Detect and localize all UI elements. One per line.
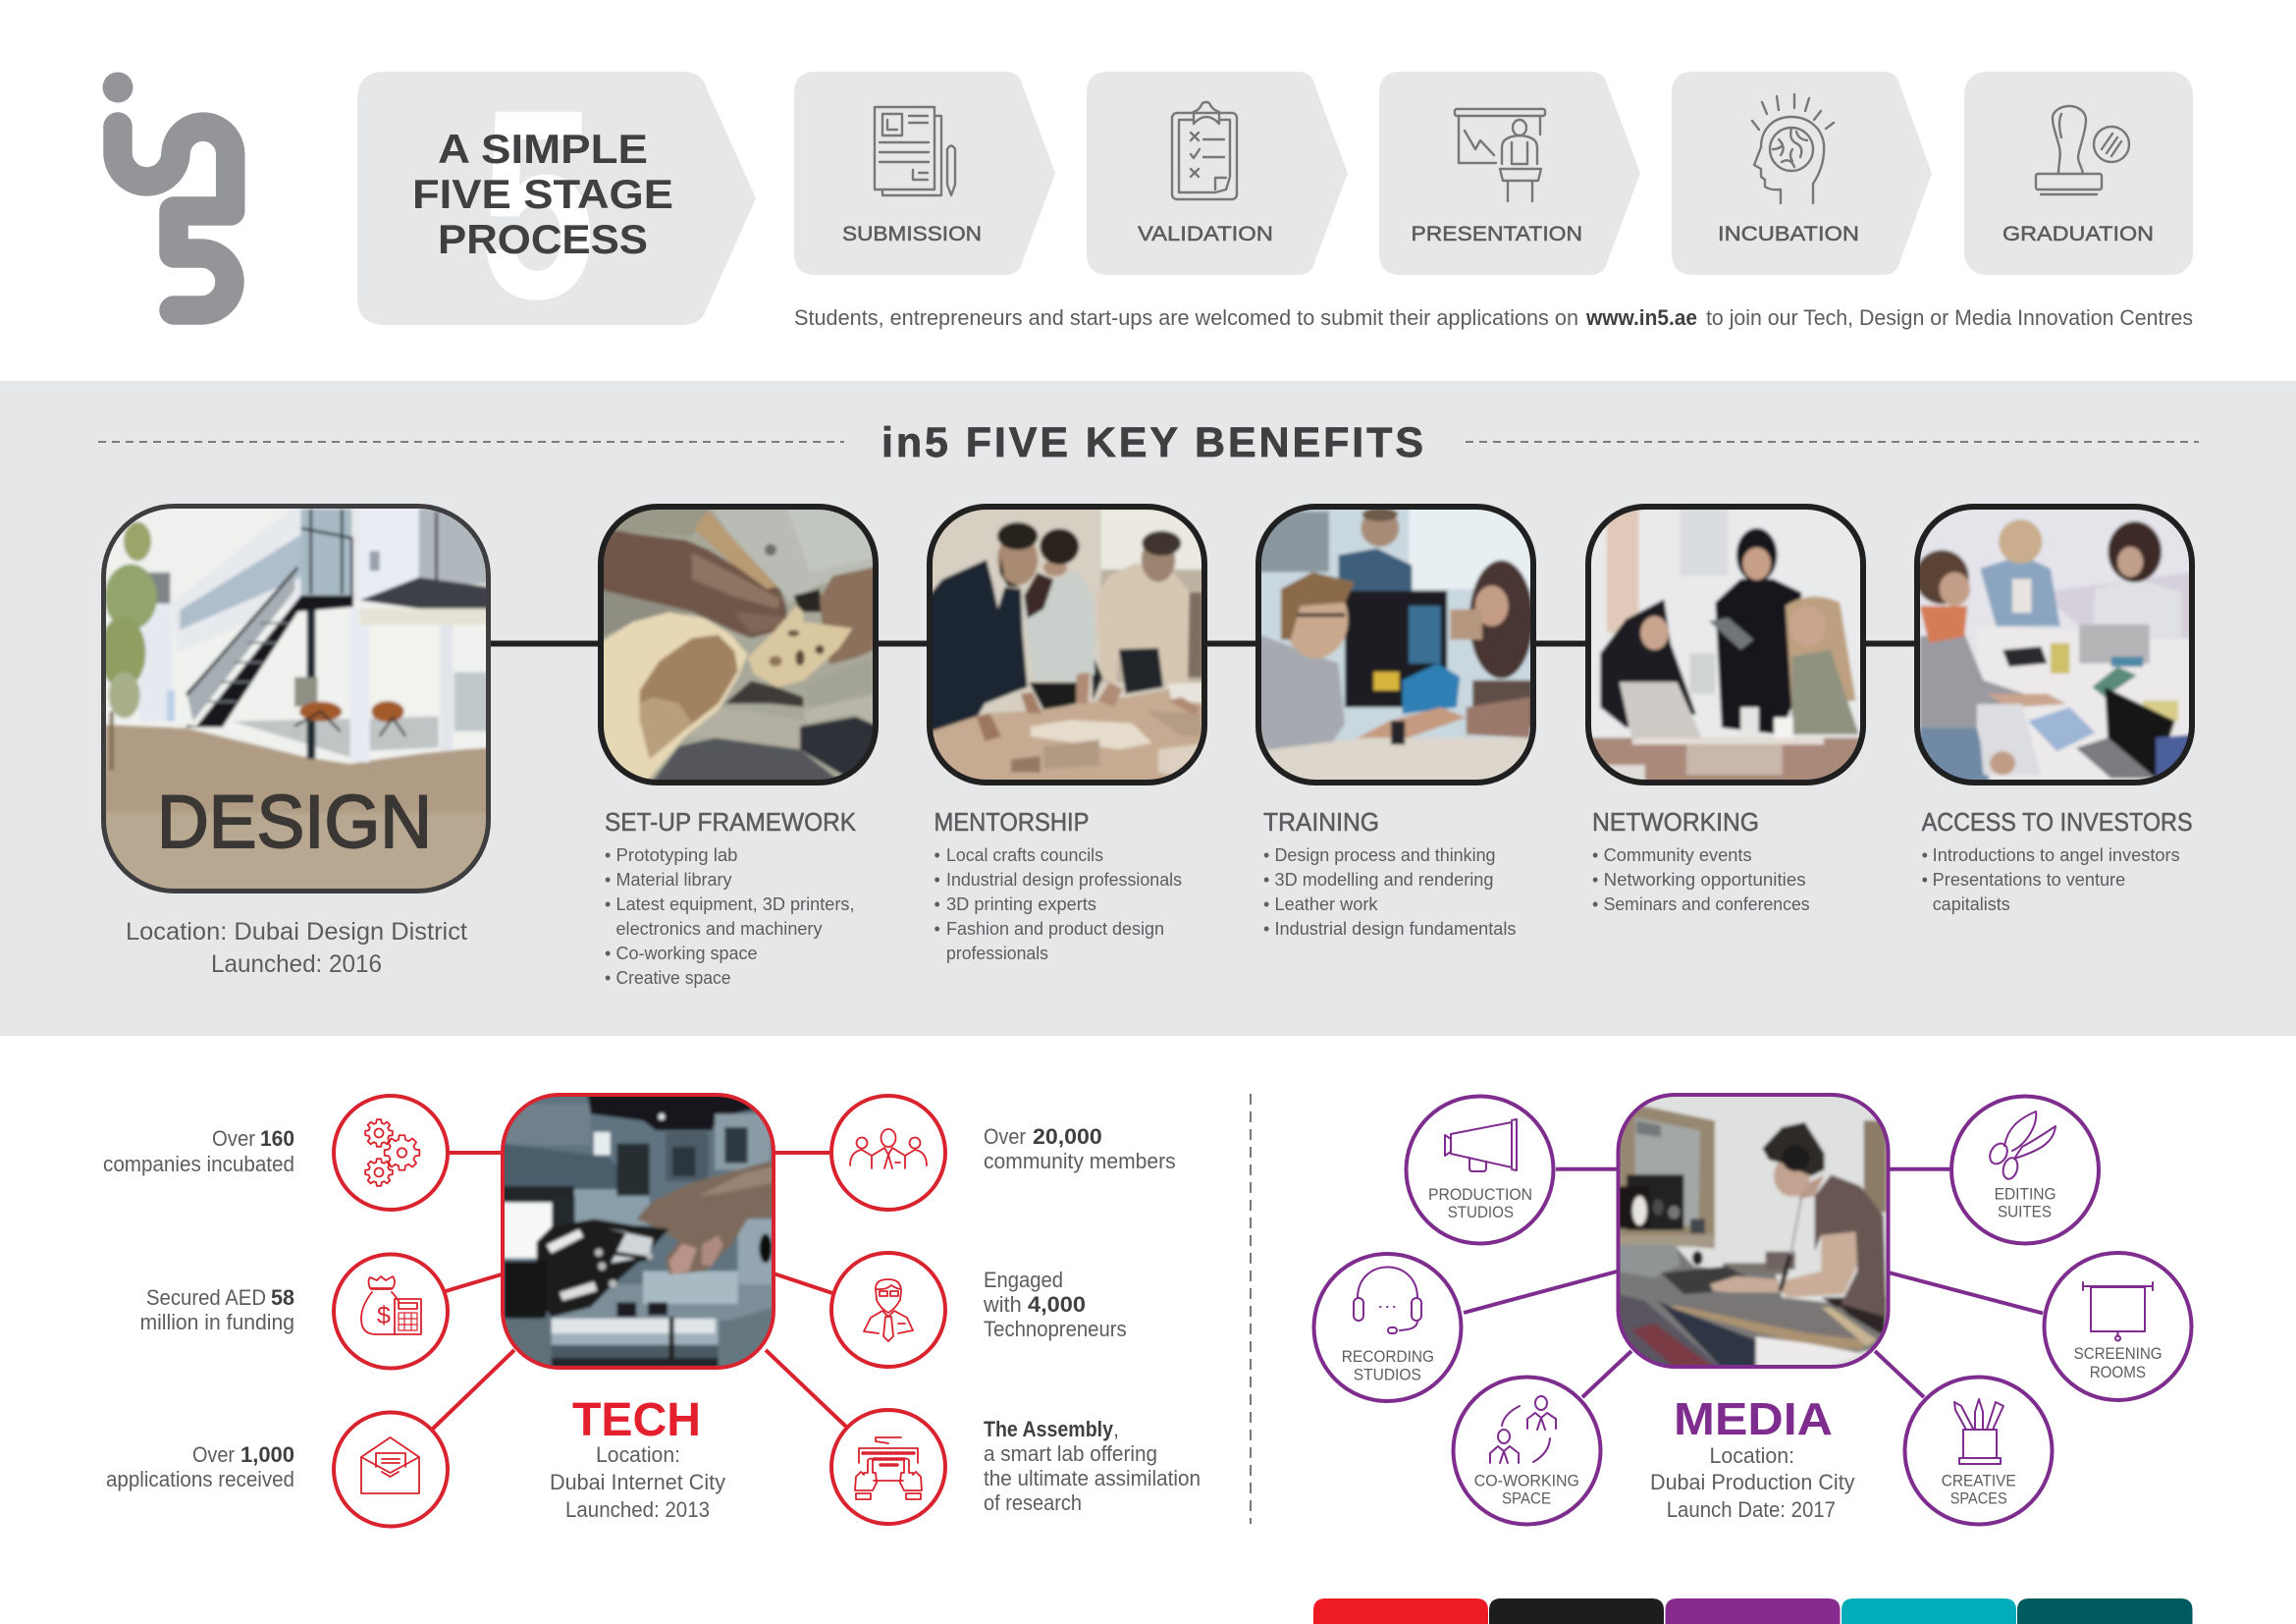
photo: access to investors — [1910, 501, 2198, 788]
text block: networking: • — [1592, 894, 1598, 914]
text block: set-up framework: • — [605, 944, 611, 963]
stat: applications: applications received — [106, 1467, 294, 1491]
icon: headset — [1354, 1267, 1421, 1333]
stage: presentation — [1379, 72, 1640, 275]
stat: technopreneurs — [983, 1268, 1127, 1341]
icon: pencil cup — [1954, 1399, 2003, 1464]
stage: validation — [1087, 72, 1348, 275]
circle: production studios — [1406, 1096, 1553, 1243]
heading: media: Launch Date: 2017 — [1667, 1497, 1836, 1522]
circle: recording studios — [1313, 1254, 1461, 1401]
panel: five key benefits — [0, 381, 2296, 1036]
photo: design building: DESIGN — [157, 781, 432, 864]
heading: media — [1650, 1393, 1855, 1522]
text block: set-up framework: Latest equipment, 3D printers, — [616, 894, 854, 914]
circle: production studios: STUDIOS — [1448, 1204, 1514, 1221]
logo: in5 — [102, 73, 231, 310]
text block: set-up framework: Creative space — [616, 968, 730, 988]
photo: training — [1250, 501, 1543, 788]
text block: set-up framework: • — [605, 845, 611, 865]
panel: a simple five stage process: PROCESS — [438, 216, 648, 262]
stat: funding — [139, 1285, 294, 1334]
photo: tech robot hand — [499, 1091, 777, 1370]
text block: networking: Seminars and conferences — [1604, 894, 1810, 914]
heading: tech: Launched: 2013 — [565, 1497, 710, 1522]
circle: screening rooms: SCREENING — [2074, 1345, 2163, 1363]
circle: screening rooms: ROOMS — [2090, 1364, 2146, 1381]
intro sentence: to join our Tech, Design or Media Innovation Centres — [1706, 305, 2193, 330]
circle: editing suites — [1951, 1096, 2099, 1243]
text: design location: Launched: 2016 — [211, 950, 382, 978]
stat: community members — [984, 1124, 1176, 1173]
icon: stamp — [2036, 106, 2129, 194]
stat: funding: 58 — [271, 1285, 294, 1310]
text block: training — [1263, 807, 1516, 939]
text block: set-up framework: Prototyping lab — [616, 845, 738, 865]
icon: technopreneur — [831, 1253, 945, 1367]
intro sentence: Students, entrepreneurs and start-ups are welcomed to submit their applications on — [794, 305, 1578, 330]
text block: networking: NETWORKING — [1592, 807, 1759, 837]
photo: networking — [1581, 501, 1869, 788]
text block: training: • — [1263, 845, 1269, 865]
stage: validation: VALIDATION — [1138, 223, 1273, 245]
connector lines: tech — [433, 1153, 846, 1429]
text block: mentorship: • — [934, 845, 940, 865]
stage: graduation: GRADUATION — [2002, 223, 2154, 245]
heading: tech: Dubai Internet City — [550, 1470, 725, 1494]
text block: set-up framework: • — [605, 894, 611, 914]
text block: training: 3D modelling and rendering — [1274, 870, 1494, 890]
text block: networking: Community events — [1604, 845, 1752, 865]
stage: incubation — [1672, 72, 1932, 275]
stat: applications: 1,000 — [240, 1442, 294, 1467]
text block: access to investors: ACCESS TO INVESTORS — [1922, 807, 2193, 837]
text block: networking: • — [1592, 845, 1598, 865]
stat: technopreneurs: 4,000 — [1028, 1292, 1086, 1317]
stat: companies incubated: Over — [212, 1126, 255, 1151]
text block: access to investors: • — [1922, 845, 1928, 865]
text block: networking: • — [1592, 870, 1598, 890]
icon: community members — [831, 1096, 945, 1210]
photo: set-up framework — [597, 504, 879, 785]
text block: access to investors: Presentations to venture — [1933, 870, 2125, 890]
stat: the assembly: a smart lab offering — [984, 1441, 1157, 1466]
stat: community members: Over — [984, 1124, 1026, 1149]
panel: a simple five stage process: 5 — [480, 54, 596, 355]
stage: submission: SUBMISSION — [842, 223, 982, 245]
panel: a simple five stage process — [357, 54, 756, 355]
icon: two people — [1490, 1396, 1556, 1463]
icon: gears — [334, 1096, 448, 1210]
circle: co-working space: SPACE — [1502, 1490, 1551, 1508]
heading: tech: Location: — [596, 1442, 680, 1467]
text block: mentorship: Fashion and product design — [946, 919, 1164, 939]
circle: co-working space — [1453, 1377, 1600, 1524]
circle: creative spaces: CREATIVE — [1942, 1472, 2016, 1489]
text block: set-up framework: electronics and machinery — [616, 919, 823, 939]
text block: set-up framework: Material library — [616, 870, 732, 890]
icon: money bag and calculator: $ — [377, 1302, 391, 1329]
icon: head with brain — [1752, 94, 1834, 203]
photo: mentorship — [926, 504, 1207, 785]
divider: dashed vertical — [1250, 1094, 1252, 1524]
circle: creative spaces — [1904, 1377, 2052, 1524]
stat: the assembly: the ultimate assimilation — [984, 1466, 1201, 1490]
text block: training: Leather work — [1274, 894, 1379, 914]
text block: mentorship: • — [934, 870, 940, 890]
text block: access to investors — [1922, 807, 2193, 914]
text block: networking — [1592, 807, 1810, 914]
circle: recording studios: STUDIOS — [1354, 1367, 1421, 1384]
stat: applications — [106, 1442, 294, 1491]
connector line — [489, 640, 1922, 646]
photo: design building — [98, 499, 496, 896]
panel: a simple five stage process: A SIMPLE — [438, 126, 648, 172]
stat: companies incubated — [103, 1126, 294, 1176]
stat: the assembly: of research — [984, 1490, 1082, 1515]
heading: tech — [550, 1394, 725, 1522]
circle: screening rooms — [2044, 1253, 2191, 1400]
text block: access to investors: • — [1922, 870, 1928, 890]
panel: a simple five stage process: FIVE STAGE — [412, 171, 673, 217]
stat: community members: community members — [984, 1149, 1176, 1173]
text block: networking: Networking opportunities — [1604, 870, 1806, 890]
stage: graduation — [1964, 72, 2193, 275]
text block: mentorship: professionals — [946, 944, 1048, 963]
stage: presentation: PRESENTATION — [1412, 223, 1582, 245]
text block: training: • — [1263, 894, 1269, 914]
icon: scissors — [1987, 1111, 2056, 1180]
icon: megaphone — [1445, 1119, 1517, 1171]
intro sentence: www.in5.ae — [1585, 305, 1697, 330]
circle: recording studios: RECORDING — [1342, 1348, 1434, 1366]
stat: the assembly: , — [1113, 1417, 1119, 1441]
colour tabs — [1313, 1598, 2193, 1624]
circle: production studios: PRODUCTION — [1428, 1186, 1532, 1204]
stat: technopreneurs: with — [983, 1292, 1022, 1317]
text block: set-up framework: SET-UP FRAMEWORK — [605, 807, 857, 837]
stat: funding: million in funding — [139, 1310, 294, 1334]
stat: the assembly: The Assembly — [984, 1417, 1114, 1441]
text block: training: • — [1263, 870, 1269, 890]
text block: set-up framework: • — [605, 870, 611, 890]
text block: training: Industrial design fundamentals — [1274, 919, 1516, 939]
text: design location — [126, 918, 467, 978]
text block: mentorship: Local crafts councils — [946, 845, 1103, 865]
icon: document and pencil — [875, 107, 955, 195]
icon: presenter at screen — [1455, 109, 1545, 201]
stat: technopreneurs: Technopreneurs — [984, 1317, 1127, 1341]
heading: media: Dubai Production City — [1650, 1470, 1855, 1494]
text block: training: Design process and thinking — [1274, 845, 1496, 865]
text block: access to investors: Introductions to angel investors — [1933, 845, 2180, 865]
icon: clipboard checklist — [1172, 102, 1237, 199]
heading: media: MEDIA — [1674, 1393, 1833, 1444]
connector lines: media — [1464, 1169, 2043, 1397]
text block: set-up framework: Co-working space — [616, 944, 758, 963]
text block: mentorship — [934, 807, 1182, 963]
text block: access to investors: capitalists — [1933, 894, 2010, 914]
text block: training: • — [1263, 919, 1269, 939]
stat: applications: Over — [192, 1442, 235, 1467]
stage: incubation: INCUBATION — [1718, 223, 1859, 245]
intro sentence — [794, 305, 2193, 330]
text block: set-up framework — [605, 807, 857, 988]
icon: keyboard and hands — [831, 1410, 945, 1524]
stat: funding: Secured AED — [146, 1285, 266, 1310]
stat: community members: 20,000 — [1033, 1124, 1102, 1149]
text block: training: TRAINING — [1263, 807, 1379, 837]
text: design location: Location: Dubai Design District — [126, 918, 467, 946]
stat: technopreneurs: Engaged — [984, 1268, 1063, 1292]
icon: money bag and calculator — [334, 1255, 448, 1369]
heading: media: Location: — [1710, 1443, 1794, 1468]
text block: mentorship: • — [934, 894, 940, 914]
stat: the assembly — [984, 1417, 1201, 1515]
icon: envelope — [334, 1412, 448, 1526]
circle: editing suites: EDITING — [1995, 1185, 2056, 1203]
heading: tech: TECH — [572, 1394, 701, 1446]
text block: mentorship: Industrial design professionals — [946, 870, 1182, 890]
circle: editing suites: SUITES — [1998, 1204, 2052, 1221]
circle: creative spaces: SPACES — [1950, 1490, 2007, 1508]
text block: mentorship: MENTORSHIP — [934, 807, 1090, 837]
icon: projector screen — [2083, 1282, 2153, 1341]
circle: co-working space: CO-WORKING — [1474, 1472, 1579, 1489]
stage: submission — [794, 72, 1055, 275]
text block: set-up framework: • — [605, 968, 611, 988]
stat: companies incubated: companies incubated — [103, 1152, 294, 1176]
photo: media studio — [1615, 1091, 1894, 1373]
stat: companies incubated: 160 — [260, 1126, 294, 1151]
text block: mentorship: 3D printing experts — [946, 894, 1096, 914]
heading: in5 five key benefits: in5 FIVE KEY BENEFITS — [881, 419, 1423, 466]
text block: mentorship: • — [934, 919, 940, 939]
